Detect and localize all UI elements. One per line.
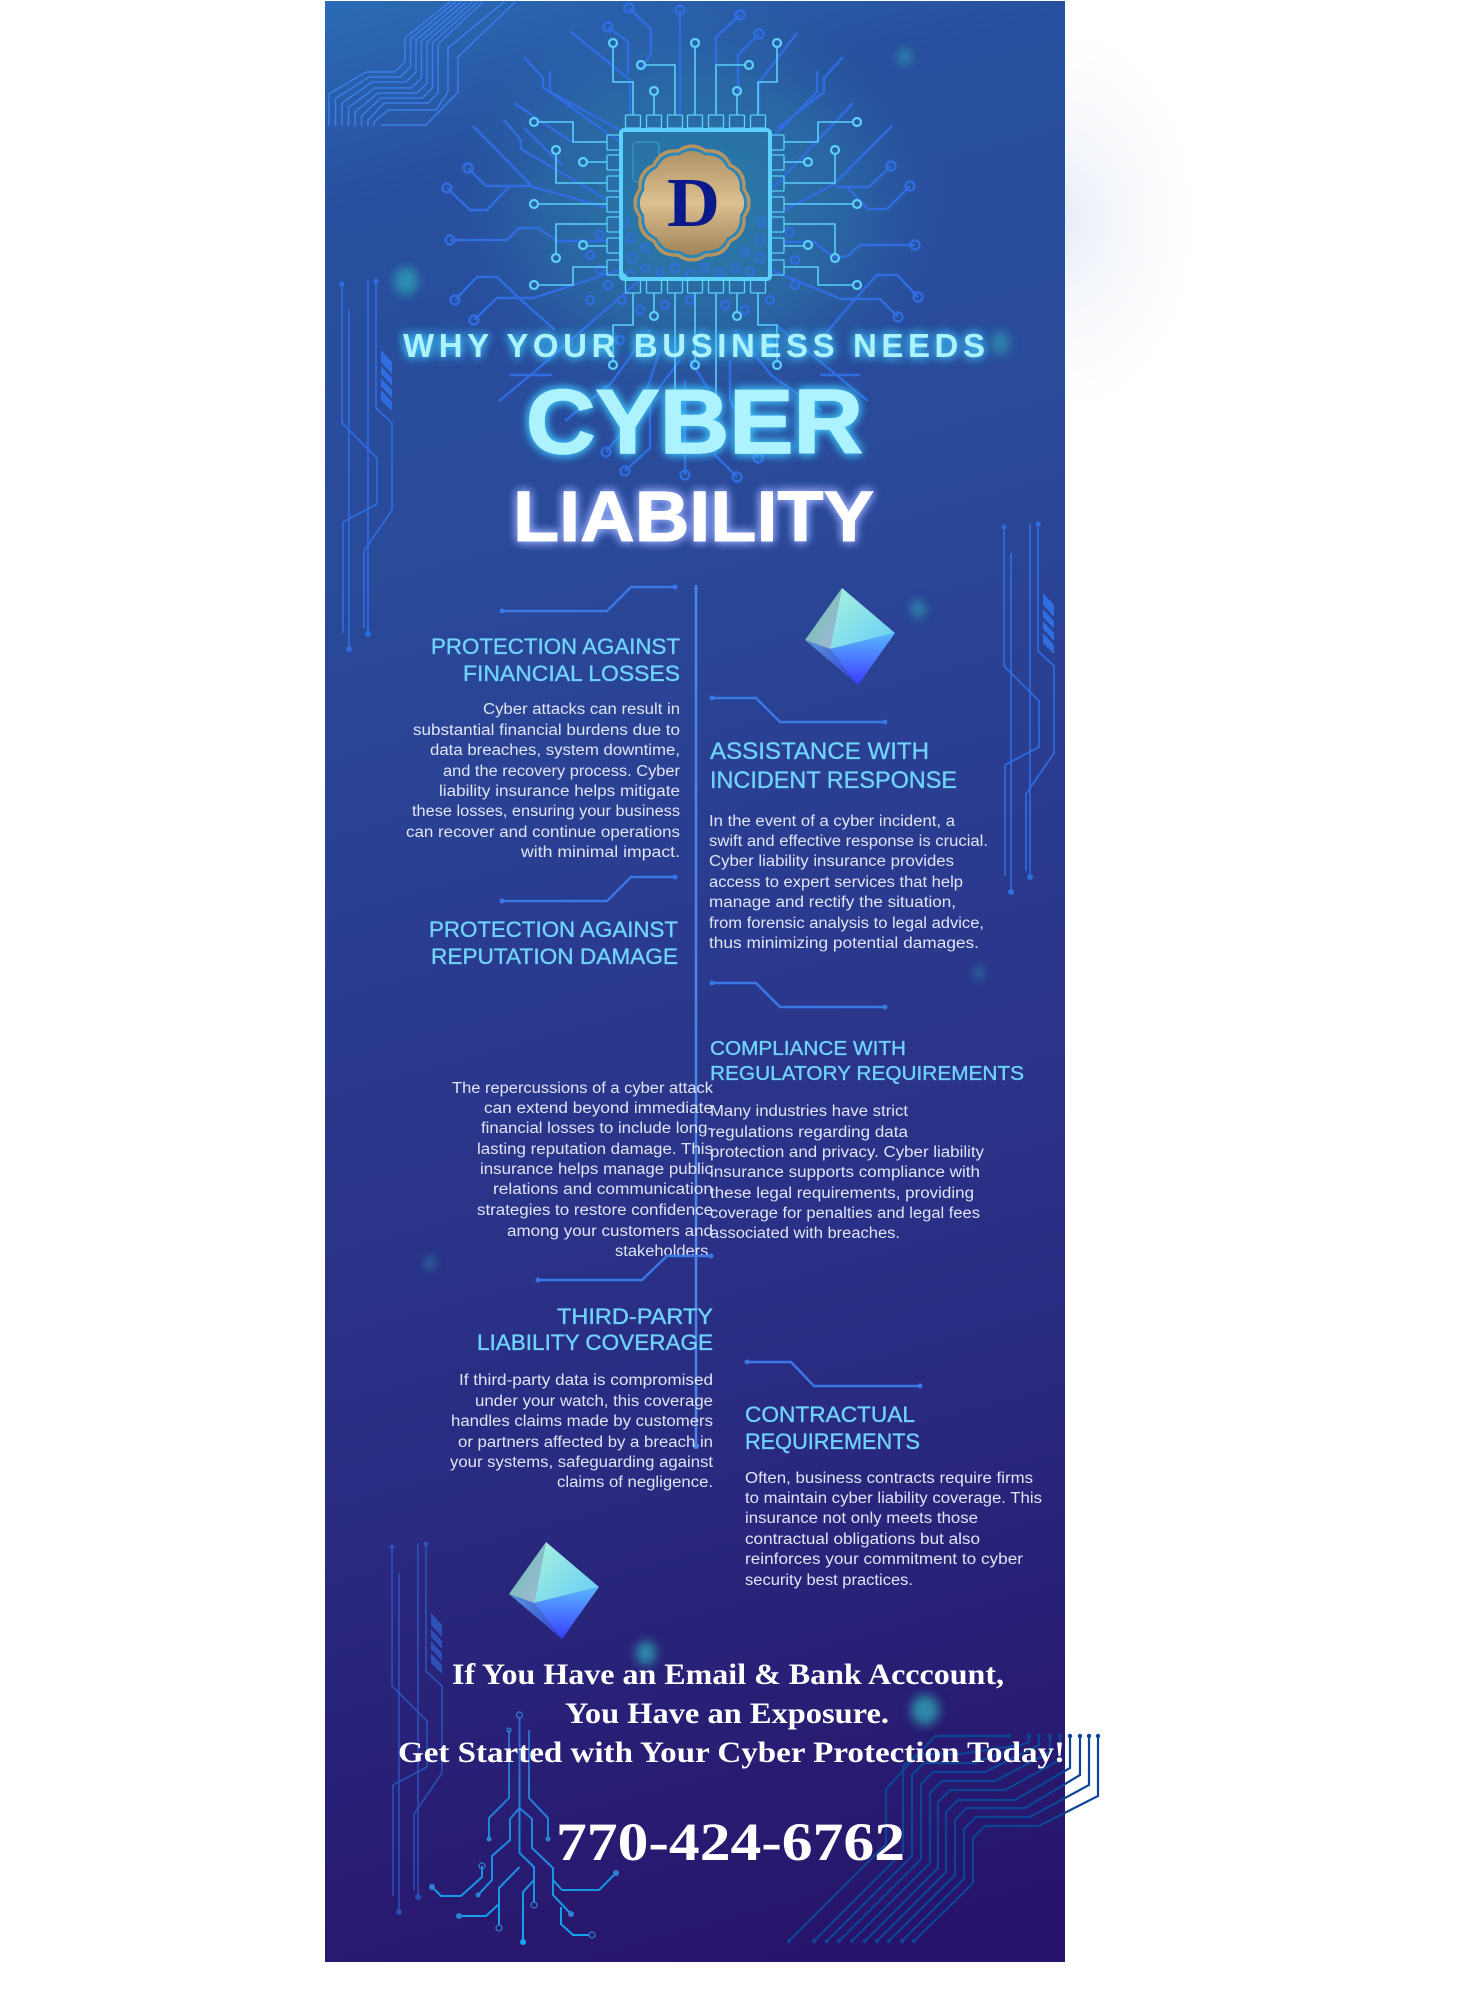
bottom-right stripe circuit — [787, 1734, 1100, 1943]
body text: reinforces your commitment to cyber — [745, 1551, 1023, 1568]
glowing spots — [394, 48, 1010, 1725]
heading — [710, 738, 957, 794]
circuit pattern circles — [586, 142, 799, 349]
body text: under your watch, this coverage — [475, 1393, 713, 1410]
tree circuit — [429, 1712, 619, 1945]
section: third-party liability coverage — [450, 1254, 714, 1491]
body text — [450, 1372, 714, 1491]
connector — [744, 1360, 922, 1388]
heading: REGULATORY REQUIREMENTS — [710, 1063, 1024, 1085]
body text: handles claims made by customers — [451, 1413, 713, 1430]
title line 1: WHY YOUR BUSINESS NEEDS — [403, 327, 985, 364]
body text: relations and communication — [493, 1181, 713, 1198]
body text: insurance supports compliance with — [710, 1164, 980, 1181]
section: assistance with incident response — [709, 696, 988, 952]
body text: data breaches, system downtime, — [430, 742, 680, 759]
body text: contractual obligations but also — [745, 1531, 980, 1548]
body text: and the recovery process. Cyber — [443, 763, 680, 780]
top-left stripe circuit — [329, 1, 516, 126]
light circuit traces — [530, 39, 861, 400]
body text: liability insurance helps mitigate — [439, 783, 680, 800]
body text: regulations regarding data — [710, 1124, 908, 1141]
heading: INCIDENT RESPONSE — [710, 767, 957, 794]
connector — [536, 1254, 714, 1282]
body text: insurance helps manage public — [480, 1161, 713, 1178]
body text: can recover and continue operations — [406, 824, 680, 841]
body text: financial losses to include long- — [481, 1120, 713, 1137]
heading — [710, 1038, 1024, 1085]
section: protection against financial losses — [406, 584, 680, 861]
body text: access to expert services that help — [709, 874, 963, 891]
section: contractual requirements — [744, 1360, 1042, 1589]
call to action: If You Have an Email & Bank Acccount, — [452, 1658, 1004, 1691]
teal glow behind chip — [446, 0, 946, 415]
body text: Cyber attacks can result in — [483, 701, 680, 718]
body text: or partners affected by a breach in — [458, 1434, 713, 1451]
microchip with pins — [607, 115, 784, 293]
heading: COMPLIANCE WITH — [710, 1038, 906, 1060]
heading — [431, 634, 680, 686]
phone number: 770-424-6762 — [556, 1812, 905, 1872]
heading — [745, 1402, 920, 1454]
heading: PROTECTION AGAINST — [429, 917, 678, 942]
connector — [710, 696, 888, 724]
body text: substantial financial burdens due to — [413, 722, 680, 739]
body text — [709, 813, 988, 952]
body text: these legal requirements, providing — [710, 1185, 974, 1202]
connector — [500, 584, 678, 614]
lower-left circuit decoration — [390, 1542, 442, 1915]
body text: Cyber liability insurance provides — [709, 853, 954, 870]
body text: protection and privacy. Cyber liability — [710, 1144, 984, 1161]
logo seal with D — [633, 144, 751, 262]
body text: associated with breaches. — [710, 1225, 900, 1242]
heading — [429, 917, 678, 969]
dark radial circuit traces — [442, 4, 922, 482]
body text: thus minimizing potential damages. — [709, 935, 979, 952]
title — [403, 327, 985, 557]
body text: insurance not only meets those — [745, 1510, 978, 1527]
heading: FINANCIAL LOSSES — [463, 661, 680, 686]
title line 2: CYBER — [526, 372, 863, 473]
body text: Often, business contracts require firms — [745, 1470, 1033, 1487]
body text: your systems, safeguarding against — [450, 1454, 714, 1471]
body text — [406, 701, 680, 861]
heading: REPUTATION DAMAGE — [431, 944, 678, 969]
body text: swift and effective response is crucial. — [709, 833, 988, 850]
center vertical line — [693, 585, 699, 1449]
connector — [500, 874, 678, 904]
call to action: Get Started with Your Cyber Protection Today! — [398, 1736, 1065, 1769]
gem top — [805, 588, 895, 685]
body text: from forensic analysis to legal advice, — [709, 915, 984, 932]
body text: Many industries have strict — [710, 1103, 909, 1120]
call to action — [398, 1658, 1065, 1769]
connector — [710, 980, 888, 1010]
body text — [710, 1103, 984, 1242]
heading: REQUIREMENTS — [745, 1429, 920, 1454]
heading: CONTRACTUAL — [745, 1402, 915, 1427]
section: compliance with regulatory requirements — [710, 980, 1024, 1242]
body text: The repercussions of a cyber attack — [452, 1080, 713, 1097]
side glow outside panel — [935, 30, 1195, 410]
gem bottom — [509, 1542, 599, 1639]
right circuit decoration — [1002, 522, 1054, 895]
body text: manage and rectify the situation, — [709, 894, 956, 911]
body text: claims of negligence. — [557, 1474, 713, 1491]
logo seal with D: D — [667, 165, 720, 242]
section: protection against reputation damage — [429, 874, 713, 1260]
body text: In the event of a cyber incident, a — [709, 813, 955, 830]
heading — [477, 1304, 713, 1355]
body text: security best practices. — [745, 1572, 913, 1589]
body text: these losses, ensuring your business — [412, 803, 680, 820]
left circuit decoration — [340, 278, 392, 652]
body text: among your customers and — [507, 1223, 713, 1240]
heading: THIRD-PARTY — [557, 1304, 713, 1329]
body text: lasting reputation damage. This — [477, 1141, 713, 1158]
body text: If third-party data is compromised — [459, 1372, 713, 1389]
body text: strategies to restore confidence — [477, 1202, 713, 1219]
heading: LIABILITY COVERAGE — [477, 1330, 713, 1355]
heading: PROTECTION AGAINST — [431, 634, 680, 659]
body text: with minimal impact. — [520, 844, 680, 861]
body text — [452, 1080, 713, 1260]
call to action: You Have an Exposure. — [565, 1697, 889, 1730]
body text: coverage for penalties and legal fees — [710, 1205, 980, 1222]
heading: ASSISTANCE WITH — [710, 738, 929, 765]
title line 3: LIABILITY — [513, 478, 874, 557]
background panel — [325, 1, 1065, 1962]
body text: can extend beyond immediate — [484, 1100, 713, 1117]
body text: stakeholders. — [615, 1243, 713, 1260]
body text: to maintain cyber liability coverage. This — [745, 1490, 1042, 1507]
body text — [745, 1470, 1042, 1589]
